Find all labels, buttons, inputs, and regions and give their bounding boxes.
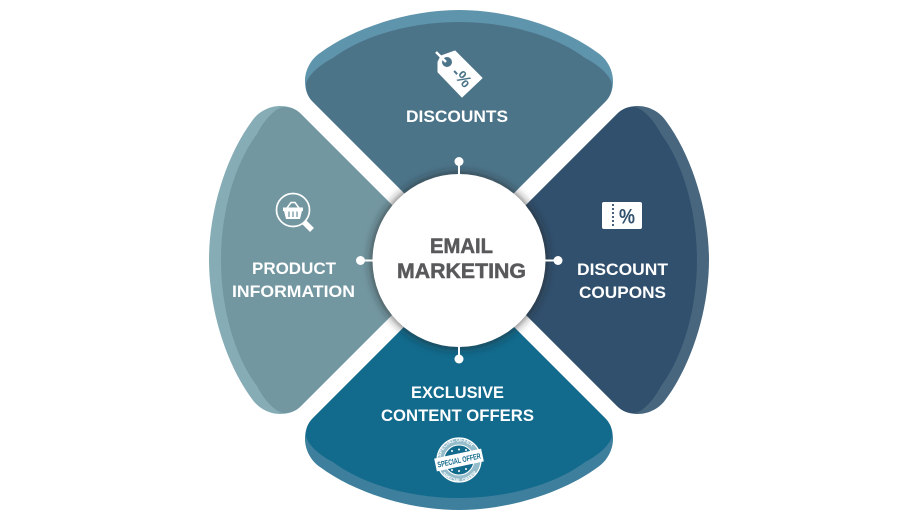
icon: price tag — [436, 51, 482, 97]
petal back: coupons — [471, 106, 709, 414]
icon: coupon ticket — [602, 202, 642, 229]
label: exclusive content offers: EXCLUSIVE — [411, 384, 504, 402]
icon: special offer stamp: SPECIAL OFFER — [437, 451, 482, 469]
label: discounts: DISCOUNTS — [406, 108, 508, 126]
centre title: EMAIL — [430, 235, 493, 258]
label: discount coupons: COUPONS — [579, 284, 666, 302]
panel: discounts — [305, 10, 613, 248]
connector: left — [356, 256, 375, 265]
petal front: product — [221, 107, 447, 413]
icon: price tag: -% — [448, 63, 476, 91]
icon: basket in magnifier — [276, 194, 312, 230]
panel: discount coupons — [471, 106, 709, 414]
petal back: discounts — [305, 10, 613, 248]
label: exclusive content offers — [381, 384, 534, 425]
centre circle — [372, 174, 546, 347]
petal back: product — [209, 106, 447, 414]
label: discount coupons: DISCOUNT — [577, 261, 668, 279]
petal front: discounts — [306, 22, 612, 248]
icon: special offer stamp — [434, 437, 484, 483]
label: discount coupons — [577, 261, 668, 302]
panel: exclusive content offers — [305, 272, 613, 510]
label: product information: PRODUCT — [252, 260, 336, 278]
centre title: MARKETING — [397, 260, 526, 283]
connector: bottom — [454, 345, 464, 364]
panel: product information — [209, 106, 447, 414]
label: exclusive content offers: CONTENT OFFERS — [381, 407, 534, 425]
connector: top — [454, 157, 464, 176]
icon: coupon ticket: % — [619, 206, 635, 228]
centre title — [397, 235, 526, 283]
label: product information: INFORMATION — [232, 283, 355, 301]
petal back: offers — [305, 272, 613, 510]
centre circle shadow — [371, 172, 547, 348]
petal front: offers — [306, 272, 612, 498]
icon: special offer stamp: SPECIAL OFFER — [438, 438, 474, 457]
icon: special offer stamp: SPECIAL OFFER — [442, 471, 476, 482]
petal front: coupons — [471, 107, 697, 413]
connector: right — [543, 256, 562, 265]
label: product information — [232, 260, 355, 301]
